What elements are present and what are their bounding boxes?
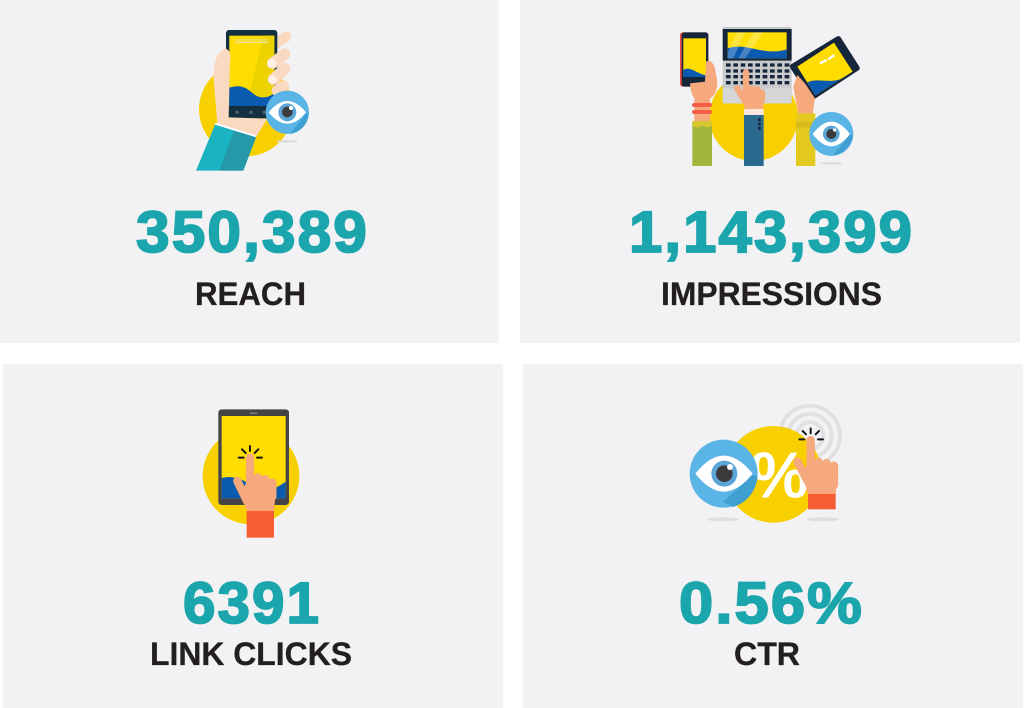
label: reach: REACH: [195, 276, 306, 312]
panel background: link clicks: [3, 364, 503, 708]
icon: eye, percent and tapping finger: [690, 406, 840, 523]
icon: finger tapping tablet: [203, 409, 299, 538]
number: link clicks: 6391: [183, 571, 321, 636]
icon: eye, percent and tapping finger: %: [751, 439, 808, 512]
panel: ctr: [523, 364, 1023, 708]
icon: hand holding phone with eye: [196, 30, 309, 171]
label: impressions: IMPRESSIONS: [661, 276, 882, 312]
number: ctr: 0.56%: [679, 571, 864, 636]
panel: impressions: [520, 0, 1020, 343]
label: ctr: CTR: [734, 636, 800, 672]
number: impressions: 1,143,399: [629, 200, 914, 265]
panel background: reach: [0, 0, 499, 343]
icon: hands using phone, laptop and tablet with eye: [680, 27, 860, 166]
panel background: impressions: [520, 0, 1020, 343]
panel background: ctr: [523, 364, 1023, 708]
label: link clicks: LINK CLICKS: [150, 636, 352, 672]
number: reach: 350,389: [136, 200, 369, 265]
panel: reach: [0, 0, 499, 343]
panel: link clicks: [3, 364, 503, 708]
